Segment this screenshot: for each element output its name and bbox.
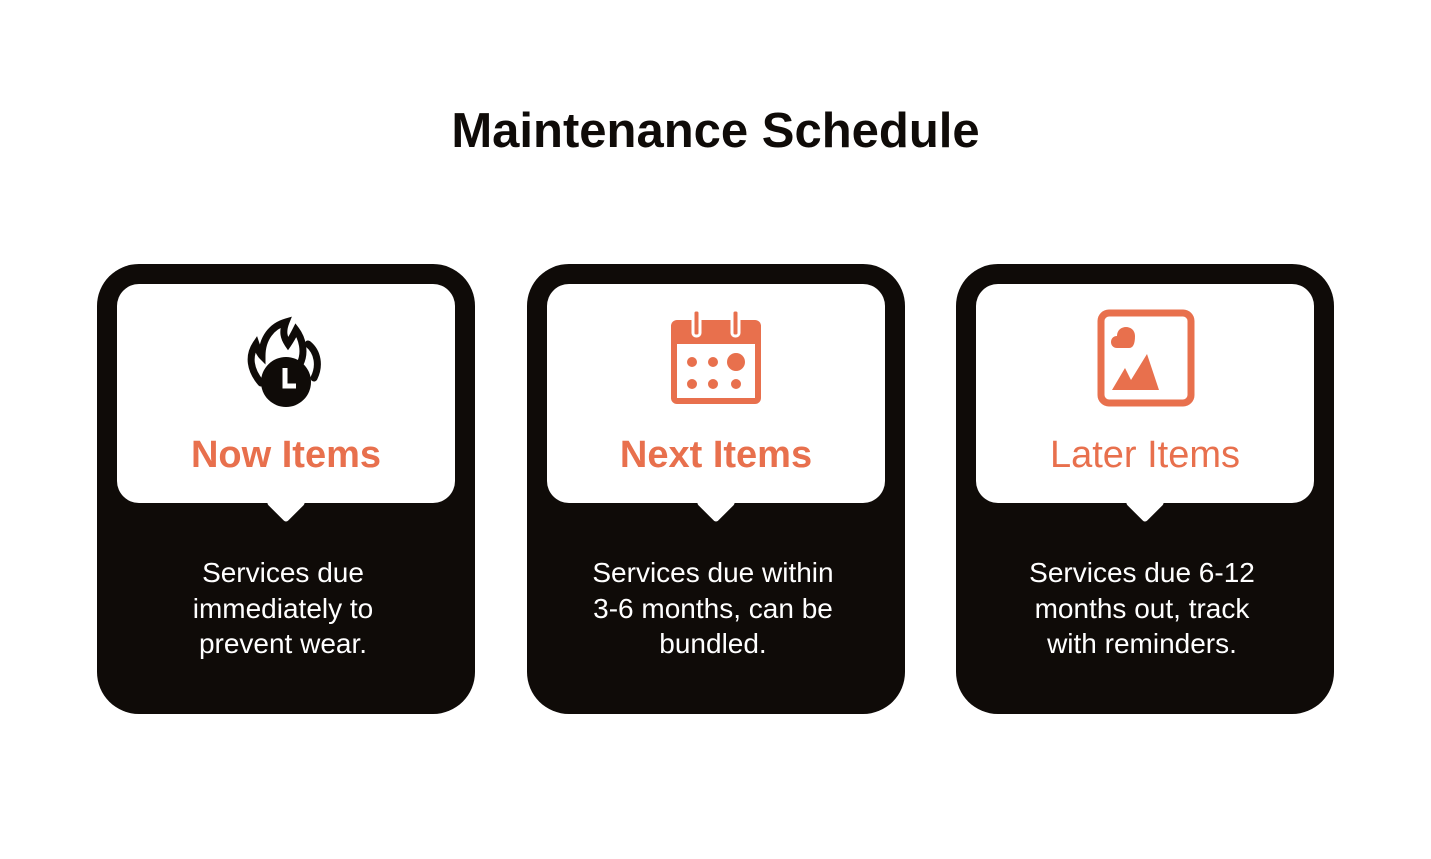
panel: now items xyxy=(97,264,475,714)
speech box xyxy=(976,284,1314,503)
icon: image xyxy=(1098,310,1194,406)
description: Services due 6-12 xyxy=(1029,557,1255,588)
description: prevent wear. xyxy=(199,628,367,659)
description: 3-6 months, can be xyxy=(593,592,833,624)
description: Services due within xyxy=(592,557,834,588)
description: immediately to xyxy=(193,592,373,624)
description xyxy=(193,557,373,659)
description: bundled. xyxy=(659,628,767,659)
heading: Next Items xyxy=(620,434,812,476)
title: Maintenance Schedule xyxy=(451,104,980,158)
description xyxy=(592,557,834,659)
speech box xyxy=(547,284,885,503)
icon: fire clock xyxy=(248,316,321,407)
heading: Later Items xyxy=(1050,434,1240,476)
heading: Now Items xyxy=(191,434,381,476)
description: months out, track xyxy=(1035,592,1249,624)
panel: later items xyxy=(956,264,1334,714)
panel: next items xyxy=(527,264,905,714)
description: Services due xyxy=(202,557,364,588)
speech box xyxy=(117,284,455,503)
description: with reminders. xyxy=(1047,628,1237,659)
icon: calendar xyxy=(671,312,761,404)
description xyxy=(1029,557,1255,659)
